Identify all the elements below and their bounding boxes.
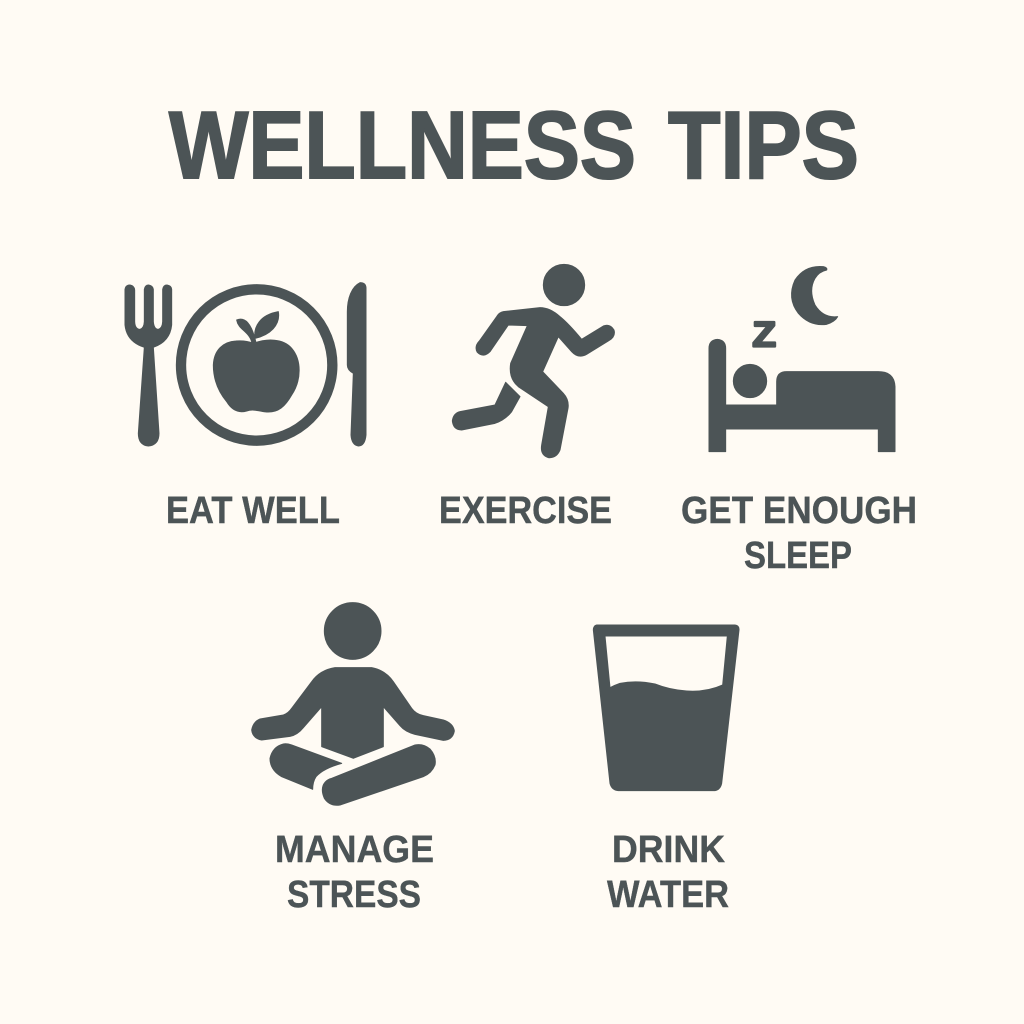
icon: meditating person xyxy=(252,603,454,805)
label: manage stress: STRESS xyxy=(287,874,421,916)
icon: knife xyxy=(347,283,366,446)
label: drink water: WATER xyxy=(607,874,729,916)
title: WELLNESS xyxy=(169,92,636,199)
label: get enough sleep xyxy=(681,490,917,577)
panel: drink water xyxy=(593,625,739,916)
icon: bed with sleeper and moon xyxy=(709,266,895,452)
label: exercise: EXERCISE xyxy=(439,490,612,532)
label: drink water xyxy=(607,829,729,916)
icon: runner xyxy=(452,264,614,458)
panel: exercise xyxy=(439,264,614,532)
label: eat well: EAT WELL xyxy=(166,490,340,532)
icon: sleep z: Z xyxy=(752,316,776,355)
icon: bed xyxy=(709,339,895,452)
icon: plate xyxy=(181,289,332,441)
panel: manage stress xyxy=(252,603,454,916)
icon: sleeper head xyxy=(733,364,767,398)
icon: fork, plate with apple, and knife xyxy=(125,283,366,446)
label: drink water: DRINK xyxy=(612,829,726,871)
label: manage stress: MANAGE xyxy=(275,829,434,871)
label: manage stress xyxy=(275,829,434,916)
panel: eat well xyxy=(125,283,366,532)
title: TIPS xyxy=(668,92,859,199)
icon: glass of water xyxy=(593,625,739,791)
icon: moon xyxy=(792,266,838,325)
icon: fork xyxy=(125,285,172,446)
icon: apple xyxy=(213,312,299,412)
panel: get enough sleep xyxy=(681,266,917,577)
label: get enough sleep: SLEEP xyxy=(744,535,852,577)
label: get enough sleep: GET ENOUGH xyxy=(681,490,917,532)
